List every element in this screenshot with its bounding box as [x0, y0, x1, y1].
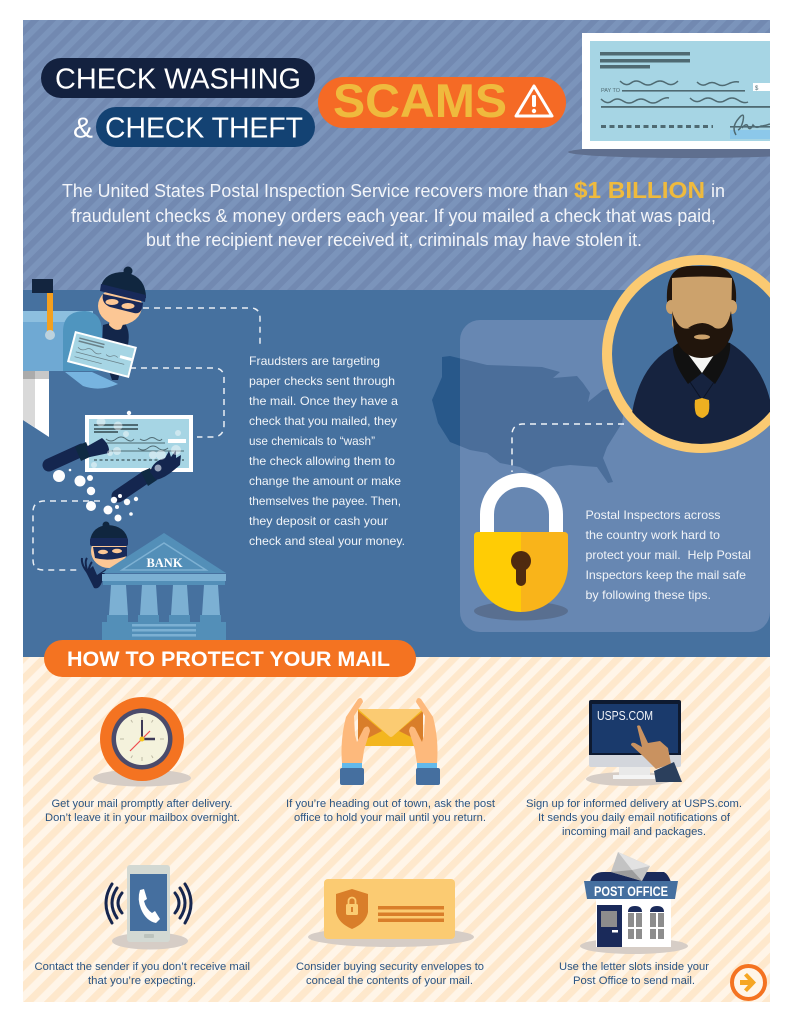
- bubbles: [53, 411, 181, 522]
- postal inspectors text: the country work hard to: [586, 528, 720, 542]
- tip 1 caption: Don’t leave it in your mailbox overnight.: [45, 812, 240, 824]
- illustration: padlock: [474, 480, 568, 620]
- tip 3 caption: It sends you daily email notifications of: [538, 812, 731, 824]
- illustration: washing check with chemical bubbles: [49, 411, 193, 522]
- postal inspectors text: by following these tips.: [586, 588, 711, 602]
- fraud explanation text: change the amount or make: [249, 474, 401, 488]
- tip 2 caption: [286, 798, 495, 824]
- bank building: BANK: [146, 556, 183, 570]
- title: check washing and check theft: CHECK THEFT: [105, 112, 303, 144]
- fraud explanation text: they deposit or cash your: [249, 514, 388, 528]
- fraud explanation text: the check allowing them to: [249, 454, 395, 468]
- illustration: thief at mailbox: [23, 266, 146, 437]
- intro text: [62, 177, 725, 250]
- thief body: [102, 320, 129, 380]
- section heading: how to protect your mail: HOW TO PROTECT YOUR MAIL: [67, 647, 390, 671]
- tip 6 caption: [559, 961, 709, 987]
- tip 6: post office icon: [580, 852, 688, 954]
- fraud explanation text: [249, 354, 405, 548]
- collar: [673, 340, 730, 384]
- check being washed: [85, 415, 193, 472]
- title badge: scams with warning icon: SCAMS: [333, 75, 507, 128]
- title: check washing and check theft: &: [73, 112, 93, 144]
- US map inside panel: [460, 358, 624, 483]
- next page arrow button: [732, 966, 765, 999]
- section heading: how to protect your mail: [44, 640, 416, 677]
- badge: [690, 382, 714, 400]
- hair: [667, 266, 736, 302]
- intro text: The United States Postal Inspection Service recovers more than: [62, 181, 568, 201]
- tip 2: hands holding envelope icon: [340, 698, 440, 785]
- tip 1 caption: Get your mail promptly after delivery.: [52, 798, 232, 810]
- beard: [672, 311, 733, 358]
- title badge: scams with warning icon: [318, 75, 566, 128]
- tip 3: computer icon: USPS.COM: [597, 709, 653, 723]
- tip 5 caption: Consider buying security envelopes to: [296, 961, 484, 973]
- cuffs: [342, 763, 362, 769]
- ears and face: [666, 300, 672, 314]
- intro text: fraudulent checks & money orders each year. If you mailed a check that was paid,: [71, 206, 716, 226]
- letter: [611, 852, 650, 881]
- tip 3 caption: [526, 798, 742, 838]
- title: check washing and check theft: [41, 58, 315, 147]
- left hand: [342, 698, 370, 763]
- title: check washing and check theft: CHECK WASHING: [55, 64, 301, 96]
- tip 5 caption: [296, 961, 484, 987]
- intro text: in: [711, 181, 725, 201]
- illustration: large check: [568, 33, 791, 158]
- illustration: thief at bank: [82, 522, 226, 640]
- intro text: but the recipient never received it, criminals may have stolen it.: [146, 230, 642, 250]
- US map outline: [432, 356, 642, 483]
- tip 6 caption: Post Office to send mail.: [573, 975, 695, 987]
- tip 5: security envelope icon: [308, 879, 474, 947]
- tip 3 caption: Sign up for informed delivery at USPS.com.: [526, 798, 742, 810]
- tip 1: clock icon: [93, 697, 191, 786]
- striped header background: [23, 20, 770, 290]
- postal inspectors text: protect your mail. Help Postal: [586, 548, 751, 562]
- right arm: [118, 450, 181, 496]
- postal inspectors text: [586, 508, 751, 602]
- tip 2 caption: If you’re heading out of town, ask the post: [286, 798, 495, 810]
- fraud explanation text: Fraudsters are targeting: [249, 354, 380, 368]
- illustration: large check: PAY TO: [601, 88, 621, 94]
- mailbox flag: [32, 279, 55, 340]
- thief: [82, 522, 128, 588]
- postal inspectors text: Postal Inspectors across: [586, 508, 720, 522]
- fraud explanation text: check that you mailed, they: [249, 414, 397, 428]
- right hand: [409, 698, 438, 763]
- small stolen check: [67, 331, 137, 378]
- blue middle background: [23, 290, 770, 657]
- dashed connector: mailbox to check: [130, 368, 224, 437]
- thief head: [98, 266, 146, 330]
- bank building: [102, 533, 226, 640]
- tip 4 caption: that you’re expecting.: [88, 975, 196, 987]
- cream tips background: [23, 657, 770, 1002]
- illustration: postal inspector portrait: [602, 255, 770, 453]
- fraud explanation text: check and steal your money.: [249, 534, 405, 548]
- dashed connector: bubbles to bank thief: [33, 501, 100, 570]
- tip 5 caption: conceal the contents of your mail.: [306, 975, 473, 987]
- tip 6: post office icon: POST OFFICE: [594, 883, 668, 899]
- tip 4 caption: Contact the sender if you don’t receive mail: [34, 961, 250, 973]
- fraud explanation text: the mail. Once they have a: [249, 394, 398, 408]
- tip 4 caption: [34, 961, 250, 987]
- tip 3 caption: incoming mail and packages.: [562, 826, 706, 838]
- dashed connector: inspector to lock: [512, 424, 624, 472]
- tip 2 caption: office to hold your mail until you return.: [294, 812, 486, 824]
- tip 6 caption: Use the letter slots inside your: [559, 961, 709, 973]
- uniform: [632, 340, 772, 450]
- illustration: large check: $: [755, 86, 759, 92]
- inspector panel: [432, 320, 770, 632]
- fraud explanation text: use chemicals to “wash”: [249, 434, 375, 448]
- mailbox post: [23, 371, 49, 437]
- fraud explanation text: themselves the payee. Then,: [249, 494, 401, 508]
- tip 3: computer icon: [586, 700, 682, 786]
- left arm: [49, 438, 109, 465]
- intro text: $1 BILLION: [574, 177, 705, 203]
- tip 4: ringing phone icon: [106, 865, 191, 950]
- fraud explanation text: paper checks sent through: [249, 374, 395, 388]
- tip 1 caption: [45, 798, 240, 824]
- dashed connector: thief to text: [143, 308, 260, 346]
- mailbox: [23, 311, 118, 389]
- postal inspectors text: Inspectors keep the mail safe: [586, 568, 746, 582]
